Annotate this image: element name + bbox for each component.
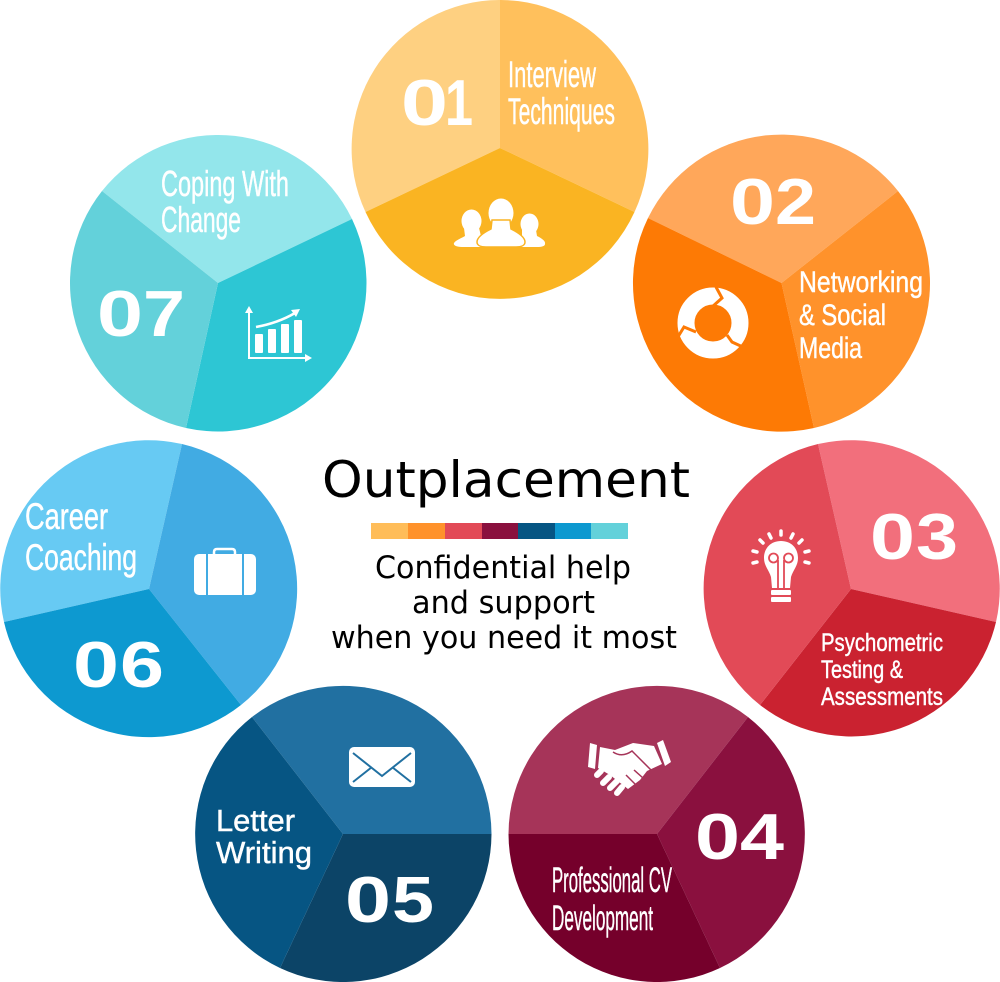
label: Letter Writing: Letter xyxy=(216,803,295,838)
icon: handshake xyxy=(588,740,671,793)
icon: cycle arrows xyxy=(676,287,745,350)
label: Professional CV Development xyxy=(552,861,672,938)
label: Networking and Social Media: Networking xyxy=(799,266,923,299)
label: Networking and Social Media xyxy=(799,266,923,365)
number 05: 5 xyxy=(392,863,434,936)
subtitle: Confidential help xyxy=(375,550,631,586)
label: Career Coaching: Coaching xyxy=(25,537,137,578)
number 05 xyxy=(345,863,434,936)
number 05: 0 xyxy=(345,863,391,936)
panel: 06 Career Coaching xyxy=(0,440,297,737)
number 07: 7 xyxy=(143,277,185,350)
label: Psychometric Testing and Assessments: Testing & xyxy=(821,656,903,684)
colour bar xyxy=(371,523,628,539)
panel: 01 Interview Techniques xyxy=(352,0,648,299)
panel: 07 Coping With Change xyxy=(70,135,366,431)
label: Letter Writing: Writing xyxy=(216,835,312,870)
number 07 xyxy=(97,277,185,350)
icon: rising bar chart xyxy=(245,306,312,362)
panel: 03 Psychometric Testing and Assessments xyxy=(704,440,1000,736)
panel: 04 Professional CV Development xyxy=(508,686,805,982)
label: Career Coaching: Career xyxy=(25,496,108,537)
label: Psychometric Testing and Assessments xyxy=(821,629,943,711)
label: Networking and Social Media: & Social xyxy=(799,299,886,332)
subtitle xyxy=(331,550,677,656)
subtitle: when you need it most xyxy=(331,620,677,656)
label: Coping With Change: Coping With xyxy=(161,163,289,204)
label: Networking and Social Media: Media xyxy=(799,332,862,365)
label: Psychometric Testing and Assessments: Psychometric xyxy=(821,629,943,657)
number 02: 2 xyxy=(775,165,816,238)
label: Psychometric Testing and Assessments: Assessments xyxy=(821,683,943,711)
label: Interview Techniques xyxy=(508,54,615,132)
label: Professional CV Development: Development xyxy=(552,899,653,938)
number 01: 0 xyxy=(401,66,448,139)
label: Interview Techniques: Techniques xyxy=(508,91,615,132)
label: Interview Techniques: Interview xyxy=(508,54,596,95)
number 01: 1 xyxy=(445,66,473,139)
panel: 04 Professional CV Development: Professional CV xyxy=(552,861,672,900)
number 06 xyxy=(73,628,164,701)
number 03: 0 xyxy=(870,500,915,573)
subtitle: and support xyxy=(412,585,595,621)
number 04 xyxy=(695,800,784,873)
icon: envelope xyxy=(349,747,415,787)
number 02 xyxy=(730,165,816,238)
number 04: 4 xyxy=(740,800,784,873)
label: Coping With Change xyxy=(161,163,289,240)
label: Career Coaching xyxy=(25,496,137,578)
number 06: 6 xyxy=(120,628,164,701)
panel: 02 Networking and Social Media xyxy=(633,135,930,432)
number 03: 3 xyxy=(916,500,958,573)
label: Coping With Change: Change xyxy=(161,199,241,240)
number 01 xyxy=(401,66,473,139)
number 04: 0 xyxy=(695,800,740,873)
number 03 xyxy=(870,500,958,573)
icon: light bulb xyxy=(753,531,809,602)
label: Letter Writing xyxy=(216,803,312,870)
icon: people xyxy=(454,198,545,247)
icon: suitcase xyxy=(194,549,256,595)
number 06: 0 xyxy=(73,628,119,701)
number 02: 0 xyxy=(730,165,775,238)
number 07: 0 xyxy=(97,277,143,350)
panel: 05 Letter Writing xyxy=(195,686,491,982)
title: Outplacement xyxy=(322,451,690,509)
